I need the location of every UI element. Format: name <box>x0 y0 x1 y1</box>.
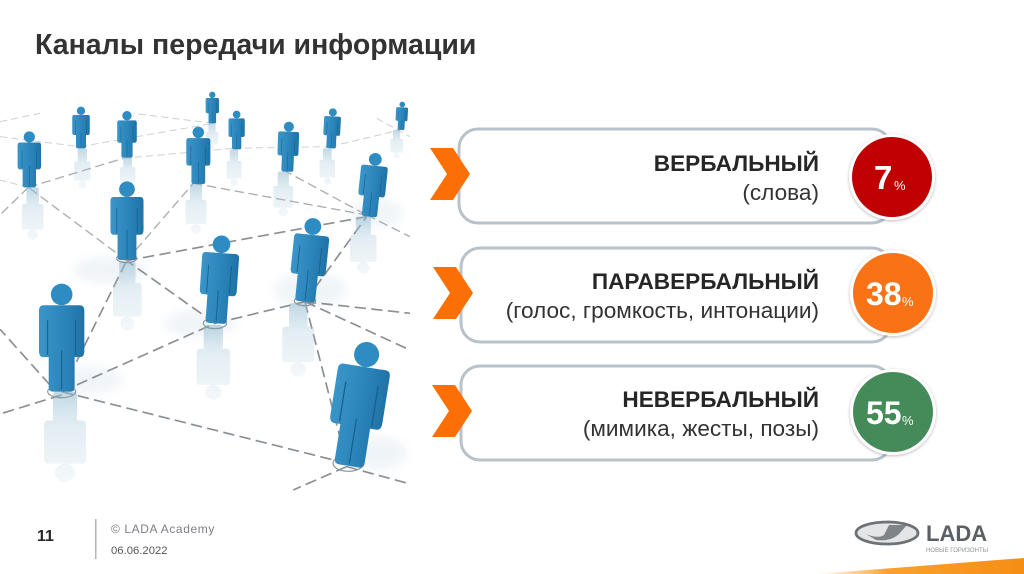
orange corner wedge <box>815 558 1024 574</box>
page number: 11 <box>37 528 54 545</box>
subtext: (мимика, жесты, позы) <box>583 416 819 441</box>
subtext: (голос, громкость, интонации) <box>506 298 819 323</box>
network people illustration <box>0 92 410 490</box>
percentage badge: % <box>902 413 914 428</box>
heading: НЕВЕРБАЛЬНЫЙ <box>622 387 819 412</box>
person 8 <box>323 108 341 149</box>
person 4 <box>206 92 219 123</box>
reflections <box>22 123 403 482</box>
person 13 <box>287 216 331 303</box>
person 12 <box>198 234 241 325</box>
person 6 <box>186 127 210 184</box>
percentage badge: % <box>894 178 906 193</box>
panel frame <box>459 129 891 223</box>
panel: verbal <box>430 129 935 223</box>
percentage badge: 55 <box>866 395 902 431</box>
date: 06.06.2022 <box>111 545 168 557</box>
person 10 <box>356 152 389 218</box>
panel: nonverbal <box>432 366 936 460</box>
chevron arrow <box>432 385 472 437</box>
chevron arrow <box>433 267 473 319</box>
network dashed lines <box>0 217 410 490</box>
percentage badge <box>850 250 936 336</box>
title: Каналы передачи информации <box>35 29 476 61</box>
person 3 <box>117 111 137 158</box>
percentage badge <box>850 369 936 455</box>
percentage badge: 38 <box>866 276 902 312</box>
person 5 <box>229 111 245 149</box>
percentage badge: 7 <box>874 159 892 196</box>
heading: ВЕРБАЛЬНЫЙ <box>654 151 819 176</box>
logo: LADA <box>856 521 988 554</box>
person 11 <box>110 181 144 260</box>
footer divider <box>95 519 96 559</box>
subtext: (слова) <box>742 180 819 205</box>
person 2 <box>72 107 90 148</box>
chevron arrow <box>430 148 470 200</box>
logo tagline: НОВЫЕ ГОРИЗОНТЫ <box>926 548 988 554</box>
soft floor shadows <box>50 200 407 470</box>
panel: paraverbal <box>433 248 936 342</box>
foot rings <box>48 254 364 471</box>
copyright: © LADA Academy <box>111 522 215 536</box>
logo emblem <box>856 522 918 544</box>
person 9 <box>395 101 408 130</box>
person 14 <box>39 284 84 392</box>
percentage badge <box>849 134 935 220</box>
panel frame <box>461 366 891 460</box>
panel frame <box>461 248 891 342</box>
person 7 <box>277 121 300 172</box>
percentage badge: % <box>902 294 914 309</box>
person 15 <box>323 338 395 470</box>
person 1 <box>18 131 41 187</box>
heading: ПАРАВЕРБАЛЬНЫЙ <box>592 269 819 294</box>
logo wordmark: LADA <box>926 521 987 546</box>
